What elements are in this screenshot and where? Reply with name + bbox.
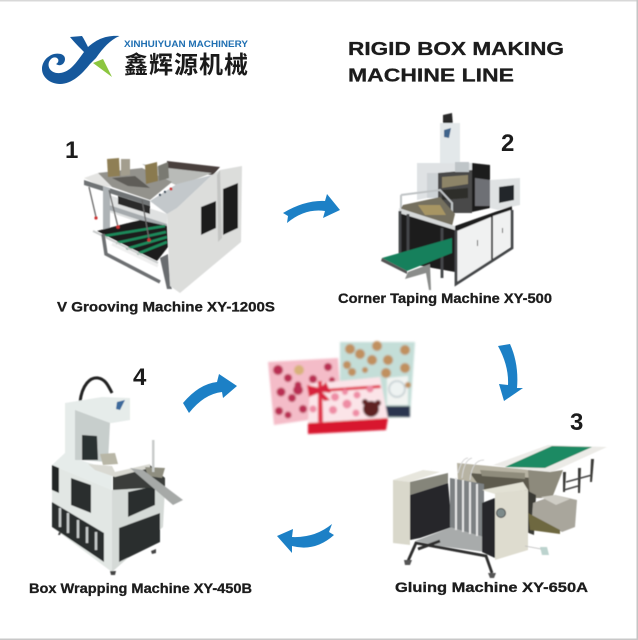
company name in English: XINHUIYUAN MACHINERY: [124, 39, 249, 50]
machine 4: box wrapping machine: [52, 378, 183, 575]
step number 3: 3: [570, 409, 583, 436]
company name in Chinese: 鑫辉源机械: [124, 51, 248, 79]
arrow: step 4 to finished products: [183, 374, 237, 413]
machine 2: corner taping machine: [381, 113, 520, 290]
machine 1: V grooving machine: [84, 158, 242, 293]
machine 3: gluing machine: [393, 445, 607, 578]
arrow: step 1 to step 2: [283, 194, 340, 223]
caption: box wrapping machine: Box Wrapping Machine XY-450B: [29, 581, 252, 596]
gift bag: pink with hearts: [268, 358, 340, 425]
title: MACHINE LINE: [348, 64, 514, 86]
finished products: gift bags and box: [268, 341, 415, 434]
title: [348, 38, 564, 86]
gift bag: teal with bears: [340, 341, 415, 418]
title: RIGID BOX MAKING: [348, 38, 564, 59]
caption: V grooving machine: V Grooving Machine XY-1200S: [57, 300, 275, 314]
step number 2: 2: [501, 130, 514, 157]
caption: corner taping machine: Corner Taping Machine XY-500: [338, 291, 552, 306]
step number 1: 1: [65, 137, 78, 164]
arrow: step 3 to step 4: [277, 524, 334, 553]
gift box: red with bow: [307, 377, 388, 434]
caption: gluing machine: Gluing Machine XY-650A: [395, 580, 588, 595]
step number 4: 4: [133, 364, 147, 391]
logo: Xinhuiyuan Machinery: [42, 36, 249, 84]
icon: CX logo mark: [42, 36, 120, 84]
arrow: step 2 to step 3: [498, 344, 523, 401]
